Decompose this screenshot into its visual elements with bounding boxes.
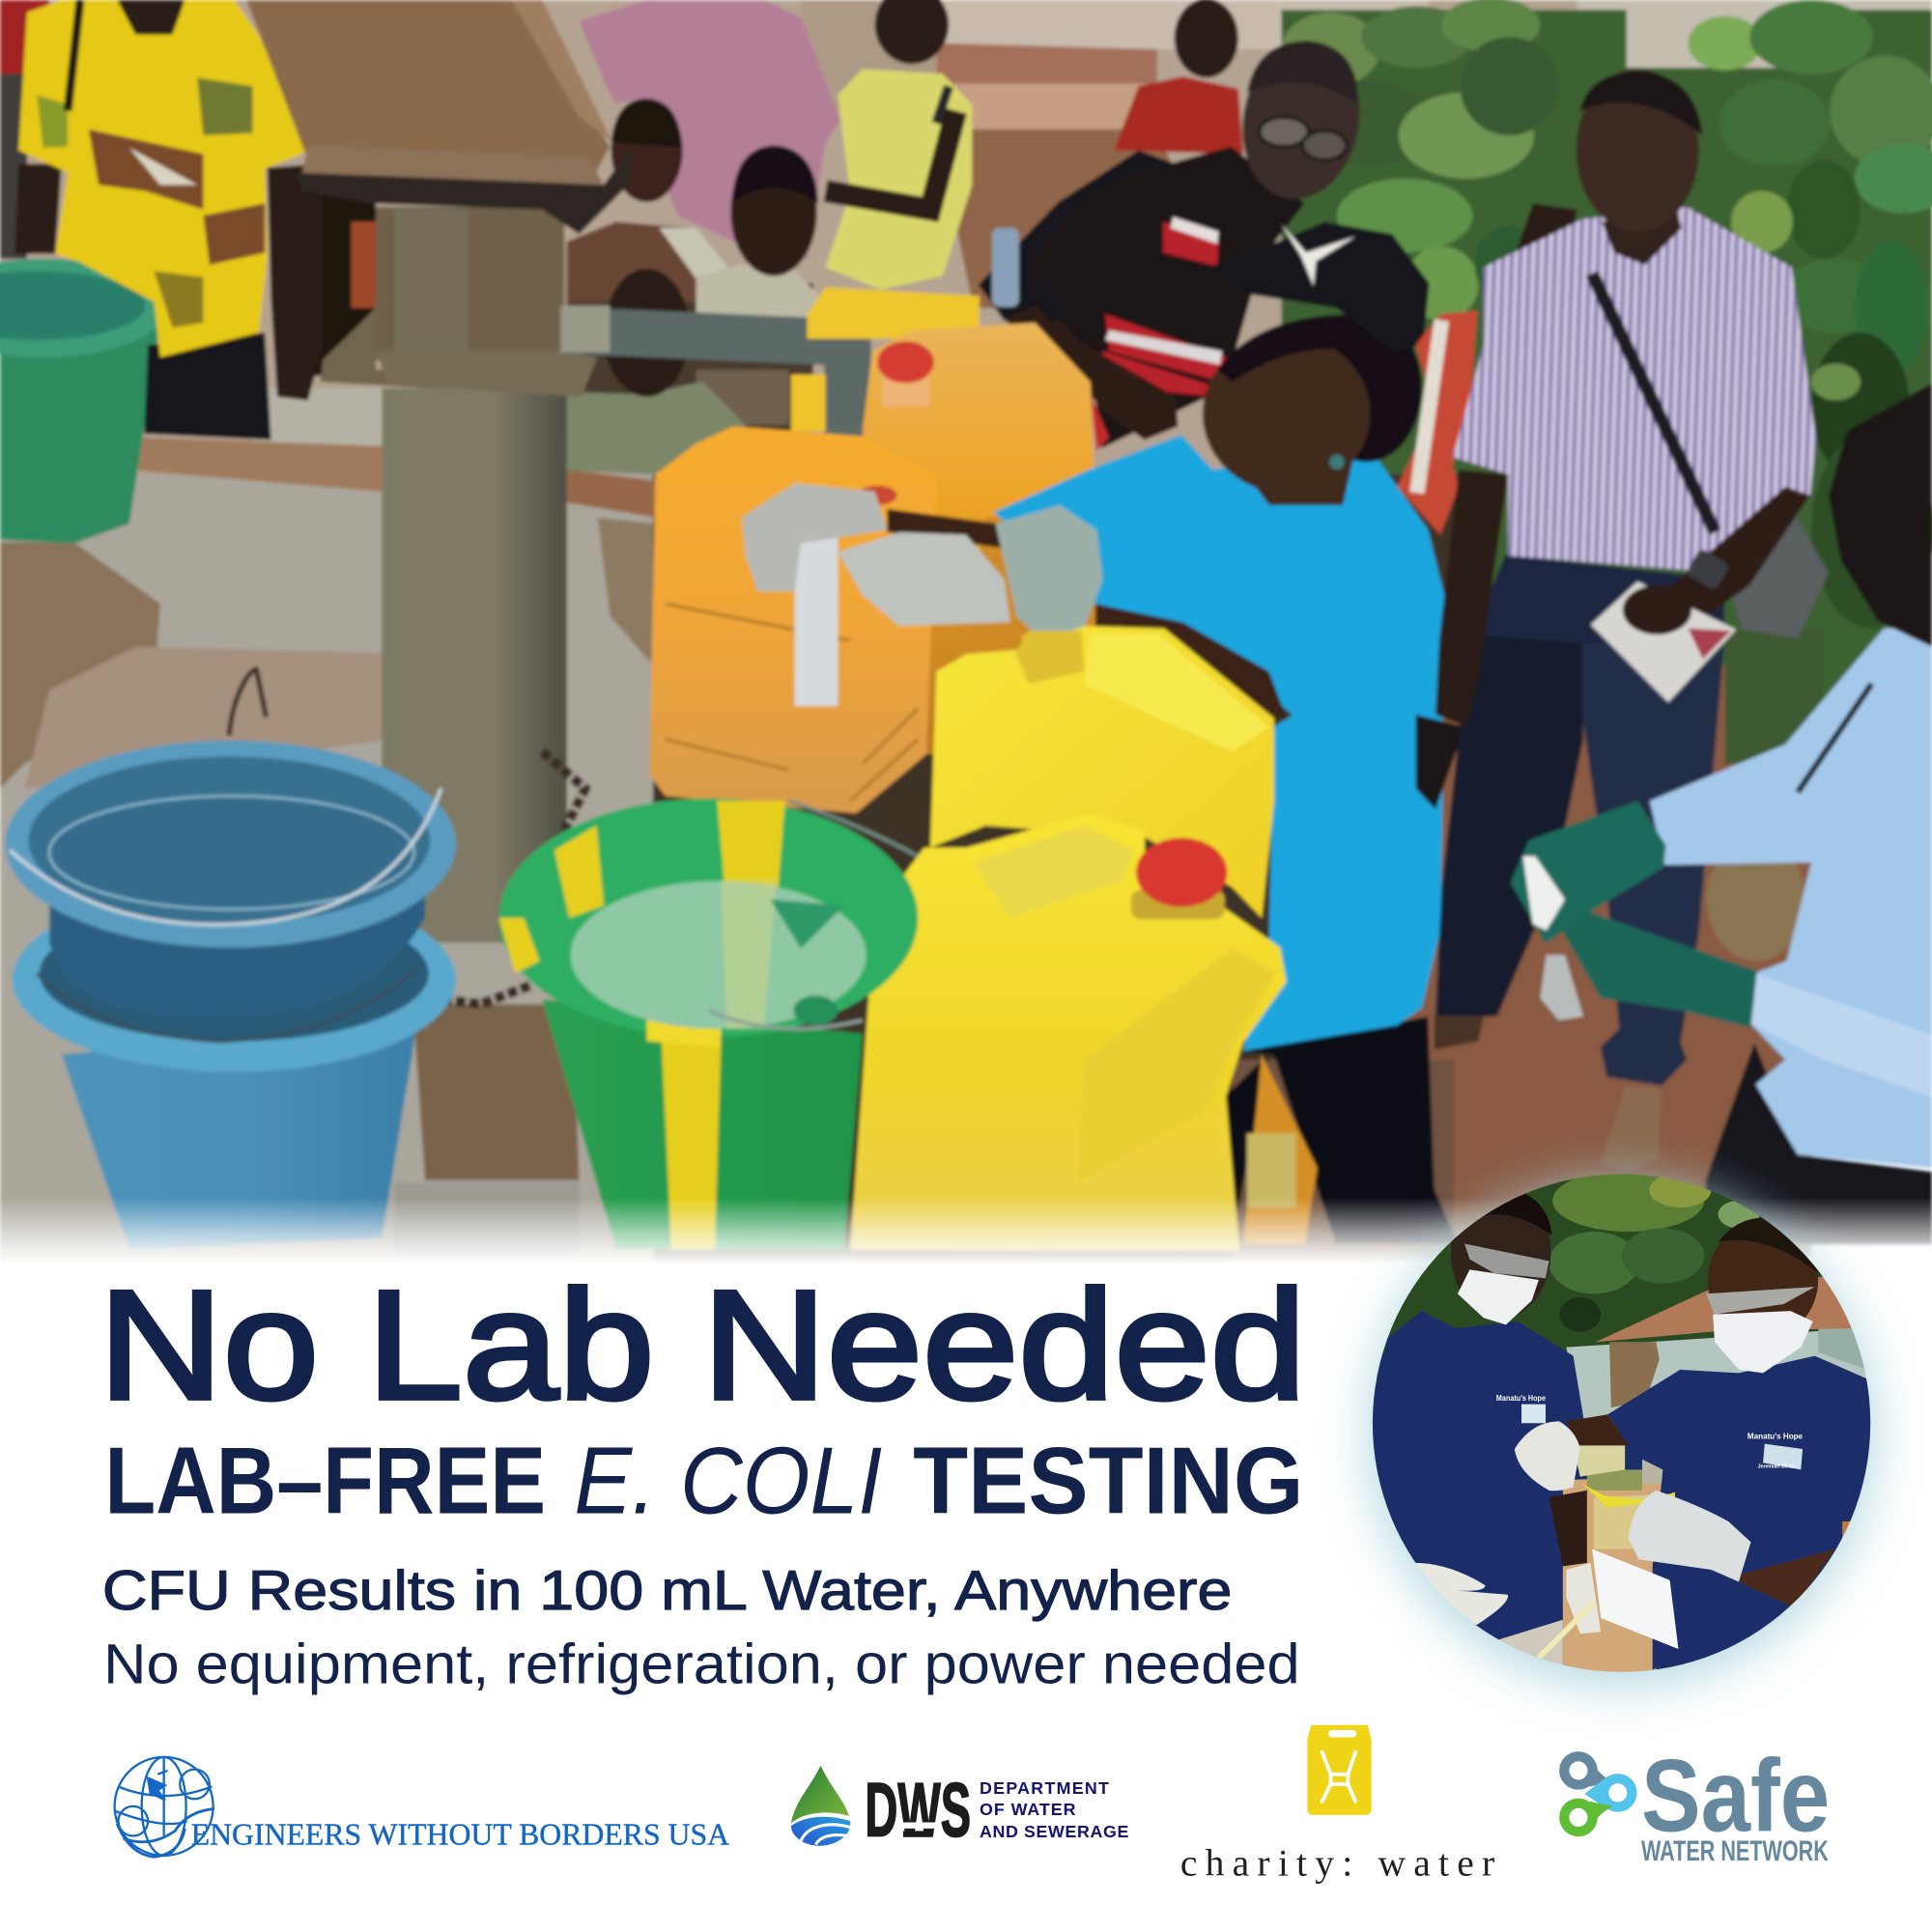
man in purple striped shirt	[1397, 69, 1829, 1172]
white lower panel	[0, 1263, 1932, 1932]
circular inset photo: two technicians filling a sample bag	[1372, 1175, 1870, 1672]
man in yellow patterned shirt	[0, 0, 323, 440]
blue buckets	[5, 741, 456, 1249]
logo: DWS Department of Water and Sewerage	[791, 1766, 1128, 1853]
charity water wordmark: charity: water	[1180, 1841, 1494, 1884]
children behind the pump	[567, 99, 819, 474]
inset: tree background	[1383, 1175, 1823, 1352]
DWS text lines	[980, 1778, 1128, 1841]
title: No Lab Needed	[99, 1260, 1306, 1433]
green and yellow bucket	[499, 799, 918, 1249]
EWB wordmark: ENGINEERS WITHOUT BORDERS USA	[191, 1817, 729, 1851]
subtitle	[104, 1427, 1303, 1533]
man in black polo shirt with backpack	[979, 0, 1372, 451]
tagline: CFU Results in 100 mL Water, Anywhere	[102, 1560, 1233, 1622]
hand pump	[246, 0, 848, 1257]
DWS drop mark	[791, 1766, 850, 1846]
gloved hands, sample bag and cut bottle	[742, 483, 1103, 706]
yellow and orange jerry cans behind	[791, 287, 1096, 754]
child in yellow vest	[826, 0, 972, 290]
subtitle part: testing: TESTING	[913, 1427, 1303, 1533]
supporting line: No equipment, refrigeration, or power needed	[103, 1633, 1300, 1695]
logo: Safe Water Network	[1564, 1737, 1830, 1867]
yellow jerry can icon	[1307, 1725, 1372, 1815]
Water Network wordmark: WATER NETWORK	[1641, 1835, 1829, 1867]
man in light blue shirt with green gloves	[1511, 384, 1932, 1244]
large yellow jerry can with red cap	[850, 813, 1287, 1251]
of water line: OF WATER	[980, 1800, 1076, 1819]
sewerage line: AND SEWERAGE	[980, 1822, 1128, 1841]
inset: right technician	[1566, 1217, 1872, 1670]
fade from photo to white	[0, 1198, 1932, 1271]
green bucket at top left	[0, 259, 166, 543]
ground: wet concrete and soil	[0, 388, 1824, 1263]
logo: charity: water	[1180, 1725, 1494, 1884]
yellow jerry can with open neck	[930, 626, 1274, 918]
inset: shirt logo right: Manatu's Hope	[1747, 1431, 1803, 1440]
foliage	[1282, 0, 1932, 750]
logo: Engineers Without Borders USA	[115, 1757, 729, 1857]
inset: building with rusty roof	[1563, 1276, 1870, 1677]
main photo: water sampling at a hand pump	[0, 0, 1932, 1263]
woman in blue polo shirt	[887, 222, 1459, 1244]
inset: left technician	[1373, 1187, 1601, 1677]
background road and wall	[0, 0, 1932, 493]
man in pink shirt	[579, 0, 840, 259]
DWS letters	[865, 1767, 971, 1853]
inset: gloves, bag and sample vial	[1515, 1421, 1750, 1658]
orange jerry can in front of the pump	[649, 426, 936, 813]
department line: DEPARTMENT	[980, 1778, 1109, 1798]
subtitle part: E. coli: E. COLI	[574, 1427, 882, 1533]
inset: shirt logo left: Manatu's Hope	[1496, 1394, 1547, 1403]
Safe wordmark: Safe	[1641, 1737, 1830, 1853]
EWB globe mark	[115, 1757, 214, 1857]
Safe Water Network rings	[1564, 1754, 1632, 1833]
subtitle part: lab-free: LAB–FREE	[104, 1427, 546, 1533]
inset: shirt verse right: Jeremiah 29:11	[1758, 1464, 1795, 1470]
DWS letters: DWS	[865, 1767, 971, 1853]
circular inset glow	[1369, 1180, 1874, 1686]
